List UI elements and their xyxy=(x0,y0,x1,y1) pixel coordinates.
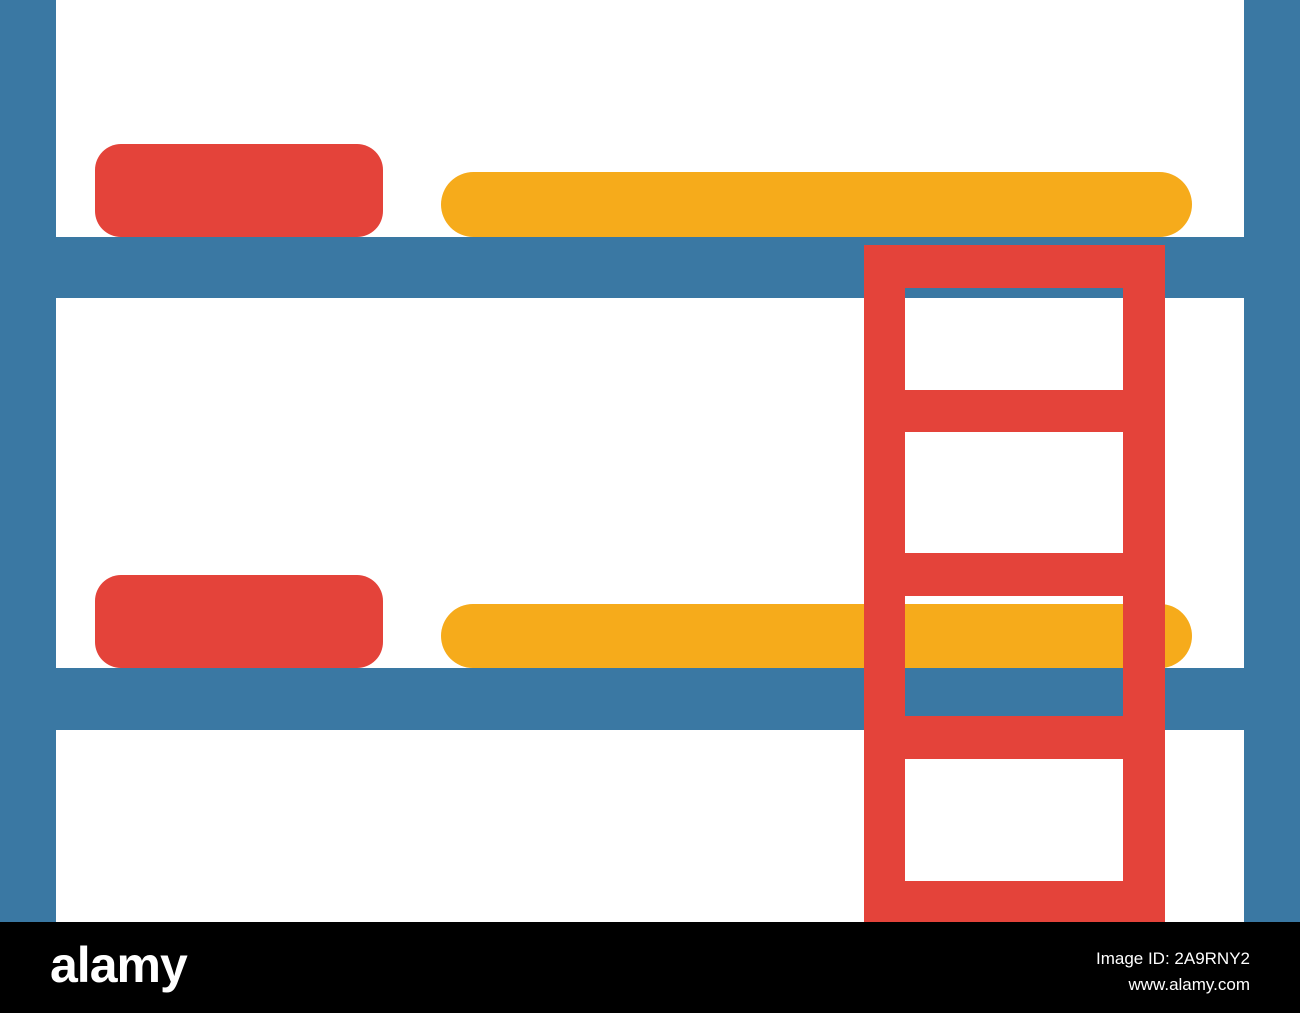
left post xyxy=(0,0,56,922)
right post xyxy=(1244,0,1300,922)
bottom pillow xyxy=(95,575,383,668)
image id: Image ID: 2A9RNY2 xyxy=(1096,949,1250,968)
bottom rail xyxy=(56,668,1244,730)
image id xyxy=(1096,949,1250,994)
top rail xyxy=(56,237,1244,298)
top mattress xyxy=(441,172,1192,237)
logo text: alamy xyxy=(50,937,187,993)
image id: www.alamy.com xyxy=(1128,975,1250,994)
ladder xyxy=(864,245,1165,922)
footer bar xyxy=(0,922,1300,1013)
bottom mattress xyxy=(441,604,1192,668)
top pillow xyxy=(95,144,383,237)
